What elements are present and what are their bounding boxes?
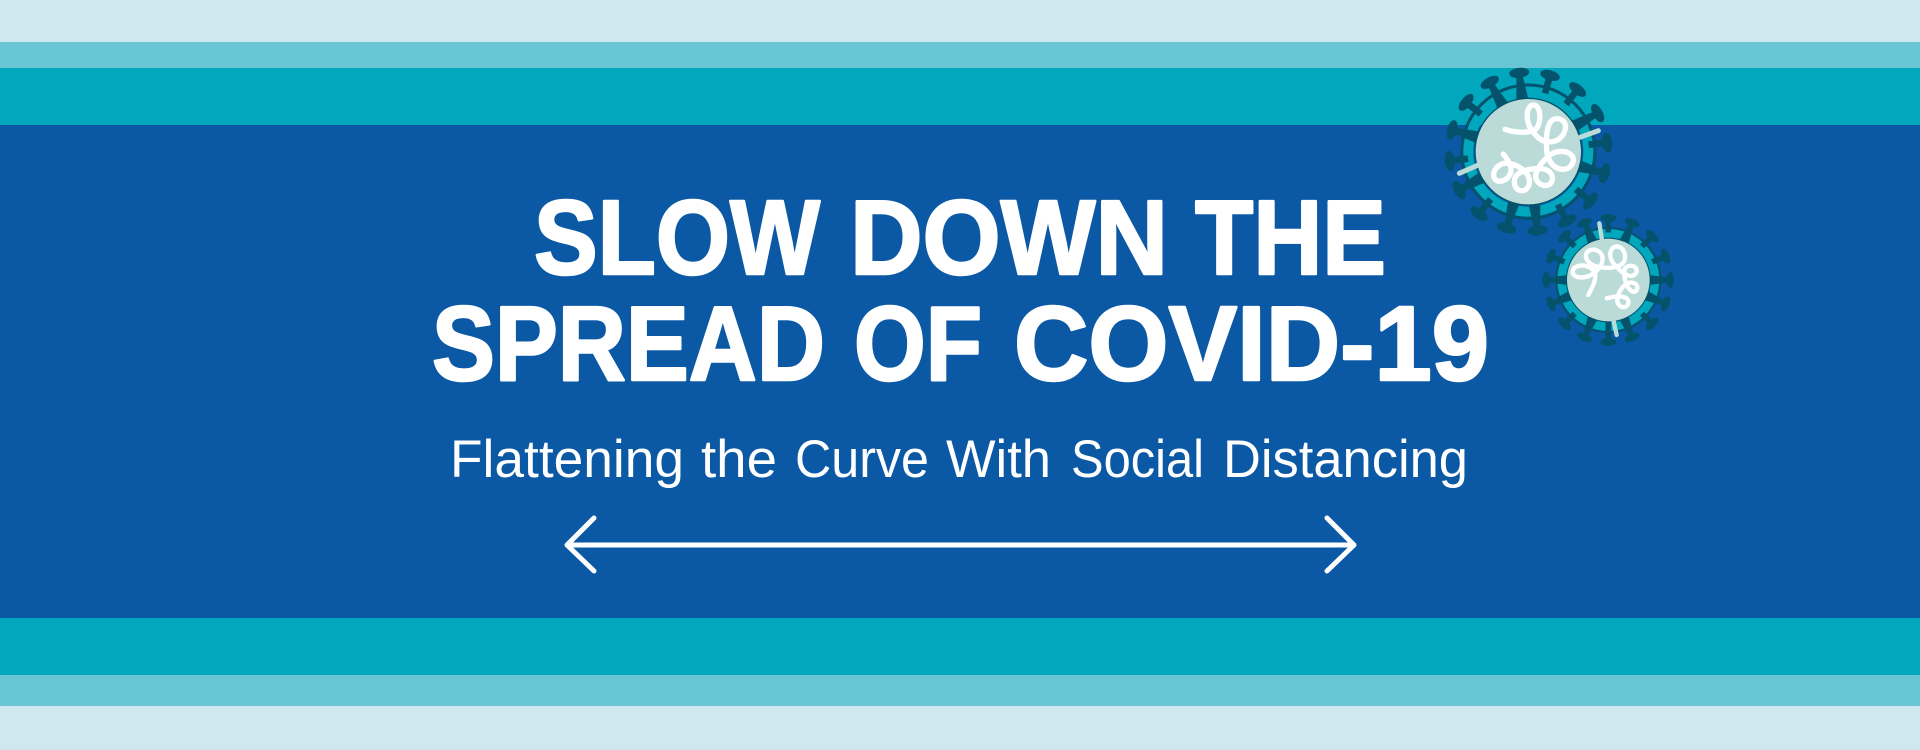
- title: THE: [1195, 179, 1386, 297]
- subtitle: the: [701, 430, 777, 489]
- subtitle: Flattening: [450, 430, 684, 489]
- title: OF: [854, 285, 982, 403]
- subtitle: [450, 430, 1468, 489]
- subtitle: Social: [1071, 430, 1204, 489]
- icon: small virus: [1543, 215, 1673, 345]
- double-headed arrow: [567, 518, 1354, 571]
- subtitle: With: [946, 430, 1051, 489]
- icon: large virus: [1445, 68, 1612, 235]
- title: SPREAD: [432, 285, 825, 403]
- subtitle: Curve: [795, 430, 929, 489]
- title: COVID-19: [1014, 285, 1489, 403]
- title: SLOW: [534, 179, 820, 297]
- subtitle: Distancing: [1223, 430, 1468, 489]
- title: [432, 179, 1489, 403]
- title: DOWN: [850, 179, 1168, 297]
